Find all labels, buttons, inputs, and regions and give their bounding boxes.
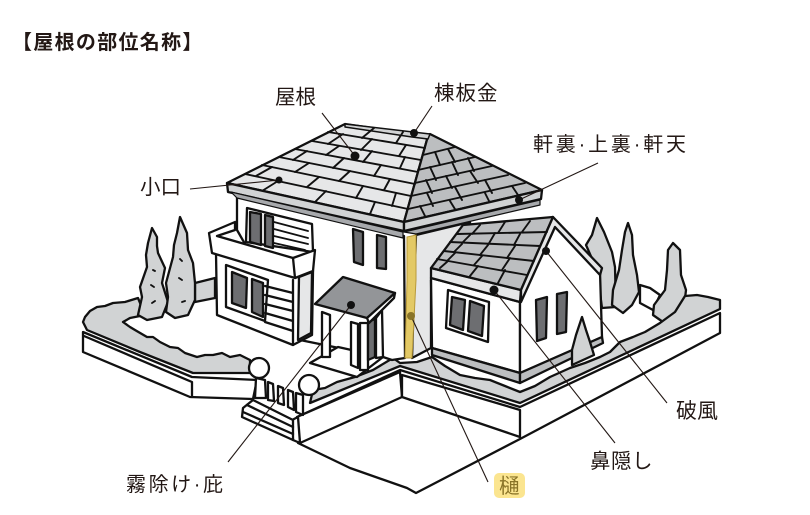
leader: 小口 bbox=[190, 176, 282, 189]
leader: 鼻隠し bbox=[490, 286, 615, 443]
label: 樋 bbox=[494, 473, 525, 498]
garden: front walls and ground bbox=[292, 313, 720, 493]
windows: main wall bbox=[353, 229, 386, 269]
wing roof bbox=[431, 217, 602, 302]
garden: right hedge bbox=[310, 295, 720, 403]
label: 軒裏・上裏・軒天: 軒裏·上裏·軒天 bbox=[533, 133, 686, 156]
tree: right 2 bbox=[612, 223, 639, 313]
leader: 屋根 bbox=[322, 113, 360, 160]
label: 樋: 樋 bbox=[499, 475, 520, 498]
main roof bbox=[227, 124, 542, 238]
label: 破風: 破風 bbox=[676, 400, 718, 423]
title: 【屋根の部位名称】 bbox=[12, 31, 204, 54]
garden: left wall bbox=[83, 332, 257, 399]
hedge ring bbox=[640, 285, 660, 310]
leader: 棟板金 bbox=[410, 106, 432, 137]
label: 屋根: 屋根 bbox=[275, 86, 316, 109]
tree: left 2 bbox=[166, 217, 195, 318]
label: 小口: 小口 bbox=[140, 176, 181, 199]
illustration: house with garden bbox=[83, 124, 720, 493]
garden: back hedge bbox=[195, 278, 215, 302]
window: upper balcony bbox=[246, 208, 313, 252]
garden: left hedge bbox=[83, 298, 250, 373]
main house walls bbox=[237, 195, 470, 360]
label: 鼻隠し: 鼻隠し bbox=[590, 450, 653, 473]
steps and gate bbox=[242, 358, 319, 440]
leader: 軒裏 bbox=[515, 163, 598, 204]
tree: right 1 bbox=[586, 218, 616, 308]
balcony bbox=[209, 222, 315, 345]
leader: 霧除け bbox=[228, 301, 355, 462]
leader: 樋 bbox=[407, 312, 488, 482]
downspout gutter bbox=[405, 235, 416, 358]
tree: right 3 bbox=[653, 243, 686, 322]
tree: small front bbox=[572, 317, 594, 365]
tree: left 1 bbox=[138, 228, 168, 320]
wing walls bbox=[431, 227, 603, 383]
label: 霧除け・庇: 霧除け·庇 bbox=[126, 473, 223, 496]
leader: 破風 bbox=[542, 247, 667, 403]
porch bbox=[310, 277, 395, 377]
label: 棟板金: 棟板金 bbox=[434, 82, 498, 105]
